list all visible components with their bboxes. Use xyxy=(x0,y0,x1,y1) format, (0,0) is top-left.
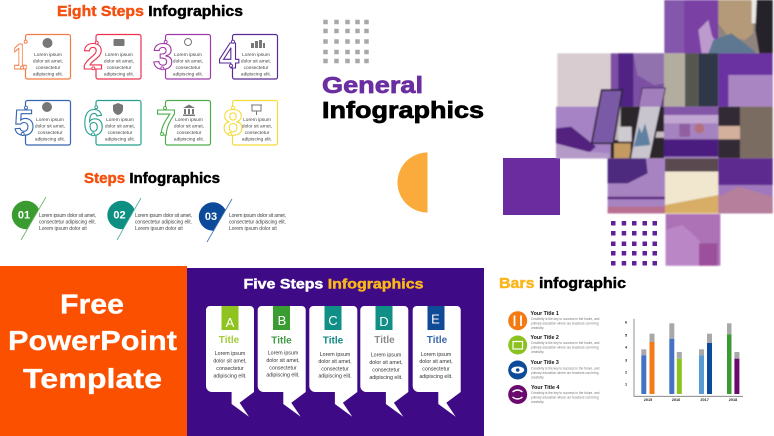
card C: consectetur xyxy=(321,366,349,372)
bars 2018 xyxy=(727,323,739,394)
step 6: dolor sit amet, xyxy=(105,124,135,130)
heading: General Infographics: General xyxy=(322,72,423,98)
x axis labels: 2015 xyxy=(644,398,652,402)
step 02 xyxy=(107,198,192,240)
step 4 xyxy=(219,34,278,79)
card A: consectetur xyxy=(216,366,244,372)
item 2: primary education where our teachers can bring xyxy=(531,346,599,350)
card C: adipiscing elit. xyxy=(318,374,352,380)
item 4: primary education where our teachers can bring xyxy=(531,396,599,400)
card E xyxy=(413,306,461,417)
item 2 xyxy=(508,335,600,354)
item 1: Creativity is the key to success in the future, and xyxy=(531,317,600,321)
step 02: 02 xyxy=(113,210,126,222)
y axis labels: 1 xyxy=(625,382,627,386)
card B xyxy=(258,306,306,417)
card C: dolor sit amet, xyxy=(318,359,352,365)
item 4 xyxy=(508,385,600,404)
step 03 xyxy=(199,199,286,242)
card D: adipiscing elit. xyxy=(369,375,403,381)
card A xyxy=(206,306,254,417)
y axis labels: 2 xyxy=(625,370,627,374)
step 4: consectetur xyxy=(244,65,269,71)
item 3 xyxy=(508,360,600,380)
card E: adipiscing elit. xyxy=(419,374,453,380)
y axis labels: 3 xyxy=(625,358,627,362)
step 1: dolor sit amet, xyxy=(33,58,63,64)
x axis labels: 2018 xyxy=(729,398,737,402)
step 3: 3 xyxy=(153,36,173,77)
step 1 xyxy=(13,34,70,79)
promo text xyxy=(8,288,177,394)
card A: dolor sit amet, xyxy=(213,358,247,364)
title: Steps Infographics: Steps Infographics xyxy=(84,171,220,187)
purple dot grid xyxy=(611,221,657,266)
step 01: consectetur adipiscing elit. xyxy=(39,220,96,226)
step 2: 2 xyxy=(83,36,103,77)
card B: adipiscing elit. xyxy=(266,372,300,378)
step 7: consectetur xyxy=(177,130,202,136)
step 02: Lorem ipsum dolor sit amet, xyxy=(135,213,192,219)
orange half circle xyxy=(398,152,428,212)
item 3: creativity. xyxy=(531,376,544,380)
title: Bars infographic: Bars infographic xyxy=(499,276,626,292)
card C: Title xyxy=(323,336,344,346)
step 2: dolor sit amet, xyxy=(104,58,134,64)
step 4: 4 xyxy=(219,35,239,76)
step 3: consectetur xyxy=(176,65,201,71)
card C: C xyxy=(328,313,338,328)
step 8: adipiscing elit. xyxy=(242,136,272,142)
step 2: adipiscing elit. xyxy=(104,72,134,78)
step 7: 7 xyxy=(156,102,176,143)
step 6 xyxy=(83,100,141,145)
item 1 xyxy=(508,311,600,330)
step 01: Lorem ipsum dolor sit amet, xyxy=(39,213,96,219)
purple square xyxy=(503,158,560,215)
step 03: Lorem ipsum dolor sit xyxy=(229,226,277,232)
step 8: dolor sit amet, xyxy=(242,124,272,130)
card B: dolor sit amet, xyxy=(266,358,300,364)
step 5 xyxy=(14,100,70,145)
step 3: Lorem ipsum xyxy=(174,52,202,58)
step 5: Lorem ipsum xyxy=(36,117,64,123)
bar chart xyxy=(625,319,743,402)
step 01 xyxy=(12,197,96,240)
step 5: 5 xyxy=(14,102,34,143)
card A: A xyxy=(226,315,235,330)
card C xyxy=(309,306,357,417)
title: Eight Steps Infographics: Eight Steps Infographics xyxy=(57,3,243,20)
item 1: primary education where our teachers can bring xyxy=(531,322,599,326)
card A: adipiscing elit. xyxy=(213,374,247,380)
axes xyxy=(634,319,743,396)
bars 2016 xyxy=(669,323,682,394)
panel: eight numbered steps xyxy=(13,34,278,145)
card D: consectetur xyxy=(372,368,400,374)
x axis labels: 2016 xyxy=(672,398,680,402)
panel: Five Steps Infographics xyxy=(187,268,484,436)
item 2: Your Title 2 xyxy=(530,335,559,341)
item 4: creativity. xyxy=(531,400,544,404)
step 1: consectetur xyxy=(36,65,61,71)
promo text: Template xyxy=(23,363,162,394)
step 01: Lorem ipsum dolor sit xyxy=(39,226,87,232)
y axis labels: 6 xyxy=(625,321,627,325)
step 8 xyxy=(223,100,278,145)
photo collage xyxy=(556,0,773,266)
step 3 xyxy=(153,34,210,79)
step 7: adipiscing elit. xyxy=(174,136,204,142)
card D: Lorem ipsum xyxy=(371,352,402,358)
step 03: 03 xyxy=(205,211,217,223)
promo text: PowerPoint xyxy=(8,325,177,356)
y axis labels: 5 xyxy=(625,333,627,337)
step 6: consectetur xyxy=(108,130,133,136)
card B: Title xyxy=(271,336,292,346)
heading: General Infographics xyxy=(322,72,484,123)
step 4: dolor sit amet, xyxy=(241,58,271,64)
x axis labels: 2017 xyxy=(700,398,709,402)
step 6: Lorem ipsum xyxy=(106,117,134,123)
card A: Title xyxy=(219,335,240,346)
step 5: dolor sit amet, xyxy=(35,124,65,130)
card E: E xyxy=(431,312,440,326)
item 2: creativity. xyxy=(531,350,544,354)
panel: Free PowerPoint Template xyxy=(0,266,187,436)
heading: Five Steps Infographics xyxy=(244,276,424,292)
card E: Title xyxy=(427,335,448,346)
item 3: Your Title 3 xyxy=(530,360,559,366)
step 2 xyxy=(83,34,141,79)
card B: B xyxy=(278,313,286,328)
item 4: Your Title 4 xyxy=(531,385,559,391)
card B: Lorem ipsum xyxy=(268,350,299,356)
step 4: adipiscing elit. xyxy=(241,72,271,78)
grey dot grid xyxy=(324,20,368,63)
card C: Lorem ipsum xyxy=(320,352,351,358)
step 7 xyxy=(156,100,210,145)
item 2: Creativity is the key to success in the future, and xyxy=(531,341,600,345)
step 01: 01 xyxy=(18,210,30,222)
step 5: adipiscing elit. xyxy=(35,136,65,142)
item 3: Creativity is the key to success in the future, and xyxy=(531,366,600,370)
card E: Lorem ipsum xyxy=(421,352,452,358)
step 03: consectetur adipiscing elit. xyxy=(229,220,286,226)
step 6: 6 xyxy=(83,102,104,143)
step 2: consectetur xyxy=(107,65,132,71)
panel: bars legend list xyxy=(508,311,600,404)
bars 2015 xyxy=(641,334,654,394)
item 4: Creativity is the key to success in the future, and xyxy=(531,391,600,395)
y axis labels: 4 xyxy=(625,345,628,349)
step 1: adipiscing elit. xyxy=(33,72,63,78)
step 7: Lorem ipsum xyxy=(175,117,203,123)
step 2: Lorem ipsum xyxy=(105,52,133,58)
step 8: consectetur xyxy=(245,130,270,136)
step 6: adipiscing elit. xyxy=(105,136,135,142)
card D xyxy=(360,306,408,417)
y axis labels xyxy=(625,321,628,386)
card D: Title xyxy=(374,335,395,346)
step 3: adipiscing elit. xyxy=(173,72,203,78)
step 7: dolor sit amet, xyxy=(174,124,204,130)
panel: three steps xyxy=(12,197,286,242)
card D: dolor sit amet, xyxy=(369,360,403,366)
step 8: 8 xyxy=(223,102,243,143)
card A: Lorem ipsum xyxy=(215,351,246,357)
step 1: 1 xyxy=(13,36,27,77)
step 03: Lorem ipsum dolor sit amet, xyxy=(229,213,286,219)
item 1: Your Title 1 xyxy=(530,311,559,317)
item 1: creativity. xyxy=(531,326,544,330)
step 02: consectetur adipiscing elit. xyxy=(135,220,192,226)
heading: General Infographics: Infographics xyxy=(322,97,484,123)
card B: consectetur xyxy=(269,366,297,372)
step 5: consectetur xyxy=(38,130,63,136)
card E: consectetur xyxy=(422,366,450,372)
x axis labels xyxy=(644,398,737,402)
step 8: Lorem ipsum xyxy=(243,117,271,123)
promo text: Free xyxy=(60,288,124,320)
item 3: primary education where our teachers can bring xyxy=(531,371,599,375)
step 3: dolor sit amet, xyxy=(173,58,203,64)
step 02: Lorem ipsum dolor sit xyxy=(135,226,183,232)
card D: D xyxy=(379,314,389,329)
card E: dolor sit amet, xyxy=(419,359,453,365)
step 4: Lorem ipsum xyxy=(242,52,270,58)
step 1: Lorem ipsum xyxy=(34,52,62,58)
bars 2017 xyxy=(699,334,712,394)
